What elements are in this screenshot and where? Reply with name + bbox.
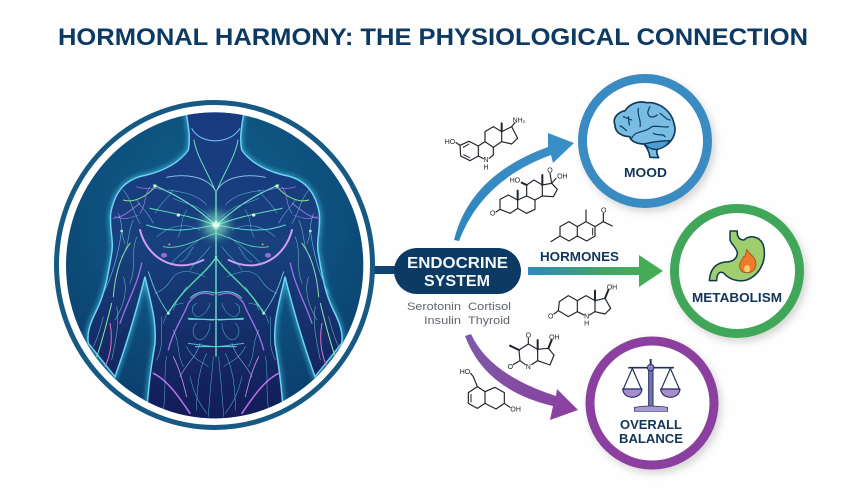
nerve network xyxy=(93,140,217,417)
molecule 1: N xyxy=(483,157,489,164)
arrow: to overall balance xyxy=(465,334,578,420)
molecule 6 xyxy=(460,369,521,414)
overall balance label: BALANCE xyxy=(619,431,683,446)
molecule 2 xyxy=(490,168,568,218)
molecule 1 xyxy=(445,118,526,171)
ring xyxy=(674,208,800,334)
molecule 1: H xyxy=(483,164,489,171)
arrow: to mood xyxy=(454,133,574,241)
molecule 4: OH xyxy=(607,284,617,291)
connector from body circle to endocrine pill xyxy=(362,266,402,274)
molecule 3: O xyxy=(601,207,607,214)
arrow: to metabolism xyxy=(528,255,663,287)
outer ring xyxy=(56,102,372,428)
endocrine system pill: ENDOCRINE xyxy=(407,255,508,272)
overall balance label: OVERALL xyxy=(620,417,682,432)
molecule 5: N xyxy=(526,364,531,371)
molecule 3 xyxy=(551,207,612,242)
molecule 5: OH xyxy=(549,334,560,341)
neck collar xyxy=(192,128,240,141)
hormone name list: Serotonin xyxy=(407,301,461,313)
icon: brain xyxy=(614,102,675,158)
molecule 2: O xyxy=(490,211,496,218)
mood label: MOOD xyxy=(624,165,667,180)
molecule 2: O xyxy=(547,168,553,175)
body illustration xyxy=(60,110,370,423)
endocrine system pill xyxy=(394,248,521,294)
metabolism label: METABOLISM xyxy=(692,290,782,305)
molecule 1: NH₂ xyxy=(513,118,526,125)
molecule 4: O xyxy=(548,314,554,321)
overall balance label xyxy=(619,417,683,446)
hormone name list: Thyroid xyxy=(468,315,510,327)
hormone name list xyxy=(407,301,511,327)
hormone name list: Cortisol xyxy=(468,301,511,313)
hormones label: HORMONES xyxy=(540,249,619,264)
molecule 4: H xyxy=(584,321,589,328)
central glow xyxy=(203,212,229,238)
panel: mood xyxy=(582,78,708,204)
icon: stomach with flame xyxy=(709,231,764,281)
molecule 2: HO xyxy=(510,177,521,184)
molecule 1: HO xyxy=(445,139,456,146)
molecule 4 xyxy=(548,284,617,328)
icon: balance scale xyxy=(623,359,680,411)
molecule 6: HO xyxy=(460,369,471,376)
panel: glowing human body circle xyxy=(56,102,372,428)
molecule 2: OH xyxy=(557,173,568,180)
title: HORMONAL HARMONY: THE PHYSIOLOGICAL CONNECTION xyxy=(58,24,808,51)
panel: overall balance xyxy=(590,341,714,465)
molecule 6: OH xyxy=(510,407,521,414)
ring xyxy=(582,78,708,204)
molecule 4: N xyxy=(584,314,589,321)
molecule 5: O xyxy=(508,364,514,371)
ring xyxy=(590,341,714,465)
molecule 5: O xyxy=(526,332,532,339)
panel: metabolism xyxy=(674,208,800,334)
hormone name list: Insulin xyxy=(424,315,461,327)
endocrine system pill: SYSTEM xyxy=(424,273,490,290)
molecule 5 xyxy=(508,332,560,371)
